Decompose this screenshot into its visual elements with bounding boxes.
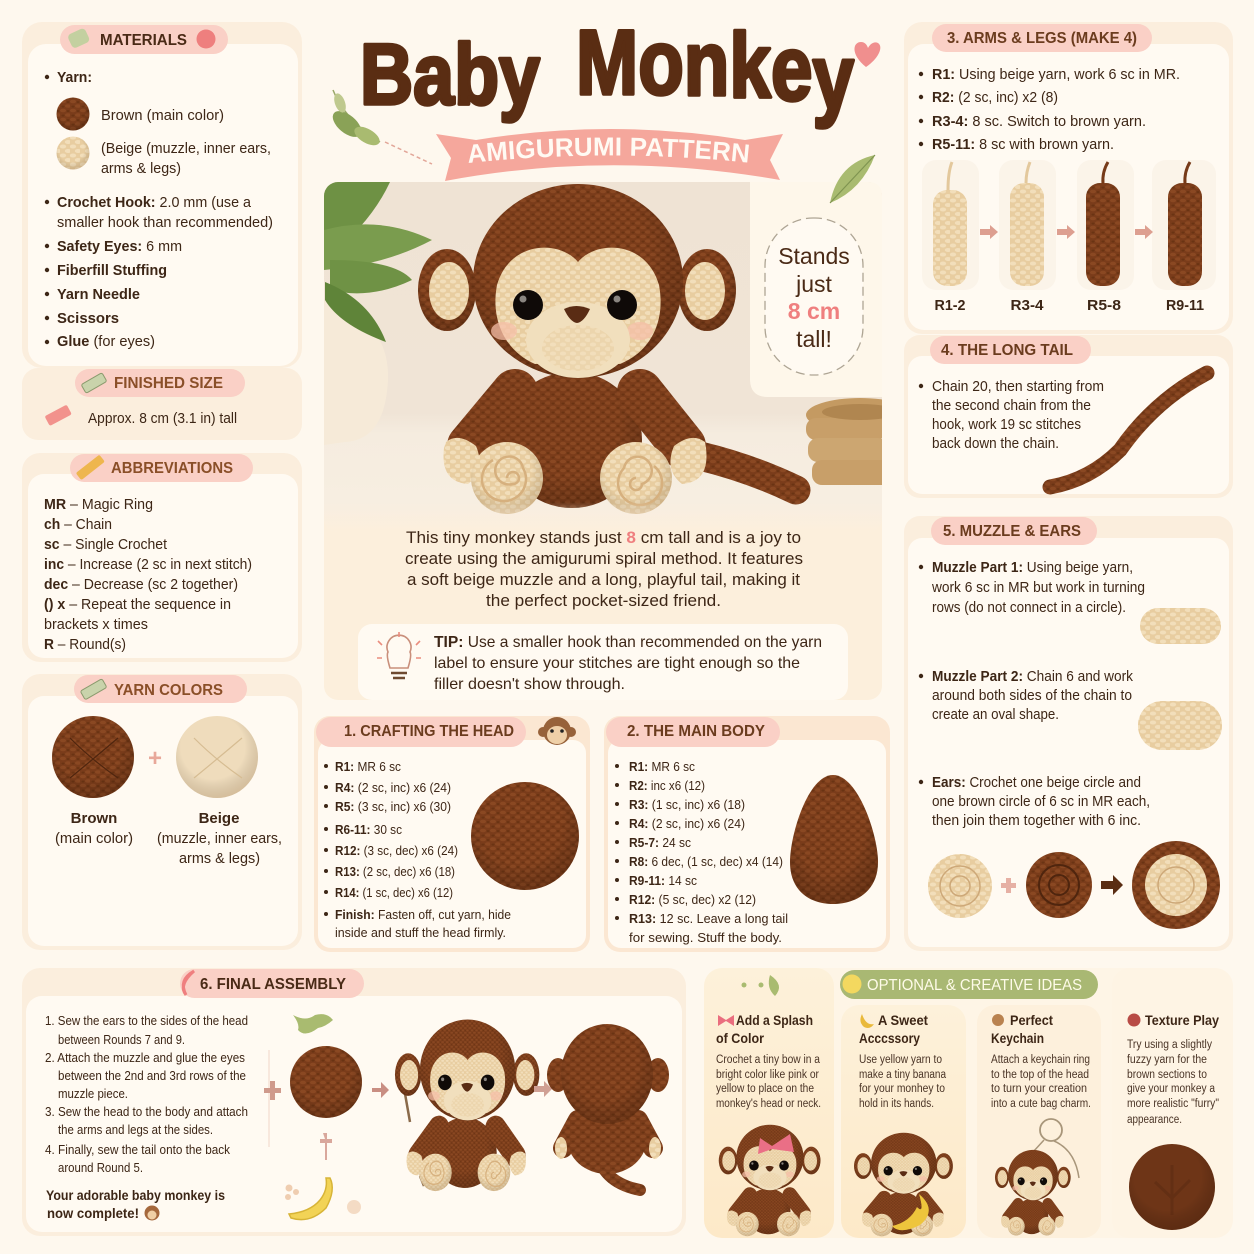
title: Monkey — [576, 12, 854, 129]
list: head rounds: R14: (1 sc, dec) x6 (12) — [335, 886, 453, 900]
heading pill: final assembly — [180, 969, 364, 998]
label: brown: (main color) — [55, 830, 133, 847]
list: body rounds: R4: (2 sc, inc) x6 (24) — [629, 817, 745, 831]
text: muzzle part 1: Muzzle Part 1: Using beige yarn, — [932, 559, 1133, 576]
text: muzzle part 1: rows (do not connect in a circle). — [932, 599, 1126, 616]
list: head rounds: R1: MR 6 sc — [335, 760, 401, 774]
panel: long tail — [904, 335, 1233, 498]
completion note: now complete! — [47, 1205, 139, 1221]
crochet head ball — [471, 782, 579, 890]
text: ears: Ears: Crochet one beige circle and — [932, 774, 1141, 791]
icon: yarn tag — [67, 27, 90, 49]
list: body rounds: R8: 6 dec, (1 sc, dec) x4 (14) — [629, 855, 783, 869]
card: a sweet accessory: A Sweet — [878, 1012, 928, 1028]
panel: yarn colors — [22, 674, 302, 950]
icon: heart — [854, 42, 880, 67]
heading pill: yarn colors: YARN COLORS — [114, 682, 223, 699]
swatch labels: R5-8 — [1087, 297, 1121, 314]
swatch: muzzle part 1 — [1140, 608, 1221, 644]
label: beige: arms & legs) — [179, 850, 260, 867]
list: materials: Yarn Needle — [57, 286, 140, 303]
plus sign: left — [264, 1081, 281, 1100]
card: perfect keychain: Perfect — [1010, 1012, 1053, 1028]
list: abbreviations: R – Round(s) — [44, 636, 126, 653]
list: assembly steps: 2. Attach the muzzle and glue the eyes — [45, 1051, 245, 1065]
tip box: filler doesn't show through. — [434, 676, 625, 693]
heading pill: materials: MATERIALS — [100, 32, 187, 49]
list: abbreviations: () x – Repeat the sequence in — [44, 596, 231, 613]
list: assembly steps: 3. Sew the head to the body and attach — [45, 1105, 248, 1119]
list: materials: Safety Eyes: 6 mm — [57, 238, 182, 255]
card: add a splash of color: Add a Splash — [736, 1012, 813, 1028]
list: materials: Scissors — [57, 310, 119, 327]
heading pill: finished size: FINISHED SIZE — [114, 375, 223, 392]
callout: stands just 8 cm tall: tall! — [796, 326, 832, 352]
icon: ruler — [80, 679, 107, 700]
label: beige: Beige — [199, 810, 239, 827]
list: head rounds: R4: (2 sc, inc) x6 (24) — [335, 781, 451, 795]
list: assembly steps: between the 2nd and 3rd rows of the — [58, 1069, 246, 1083]
title — [360, 12, 854, 129]
card: texture play: brown sections to — [1127, 1069, 1207, 1081]
plant pot — [324, 300, 388, 445]
text: finished size: Approx. 8 cm (3.1 in) tall — [88, 410, 237, 427]
list: head rounds: R12: (3 sc, dec) x6 (24) — [335, 844, 458, 858]
heading pill: yarn colors — [74, 675, 247, 703]
list: head rounds: R5: (3 sc, inc) x6 (30) — [335, 800, 451, 814]
list: body rounds: R2: inc x6 (12) — [629, 779, 705, 793]
list: materials: (Beige (muzzle, inner ears, — [101, 140, 271, 157]
card: perfect keychain: into a cute bag charm. — [991, 1098, 1091, 1110]
list: head rounds: R13: (2 sc, dec) x6 (18) — [335, 865, 455, 879]
card: a sweet accessory: hold in its hands. — [859, 1098, 934, 1110]
text: muzzle part 2: create an oval shape. — [932, 706, 1059, 723]
card: a sweet accessory: for your monhey to — [859, 1083, 945, 1095]
heading pill: muzzle and ears: 5. MUZZLE & EARS — [943, 523, 1081, 540]
monkey tail — [700, 456, 796, 490]
swatch labels: R3-4 — [1010, 297, 1044, 314]
card: add a splash of color — [704, 968, 834, 1238]
divider line — [268, 1050, 270, 1147]
list: head rounds — [324, 760, 511, 940]
basket — [806, 398, 882, 485]
heading pill: materials — [60, 25, 228, 54]
completion note — [46, 1187, 225, 1221]
card: texture play: appearance. — [1127, 1114, 1182, 1126]
icon: ruler — [81, 373, 107, 393]
list: body rounds: R9-11: 14 sc — [629, 874, 697, 888]
icon: monkey face — [538, 717, 576, 745]
text: long tail — [919, 378, 1104, 452]
text: muzzle part 2: Muzzle Part 2: Chain 6 and work — [932, 668, 1133, 685]
swatch: R5-8 — [1086, 162, 1120, 286]
title: Baby — [360, 27, 540, 123]
card: texture play: Try using a slightly — [1127, 1039, 1212, 1051]
completion note: Your adorable baby monkey is — [46, 1187, 225, 1203]
text: ears: one brown circle of 6 sc in MR each, — [932, 793, 1150, 810]
callout: stands just 8 cm tall — [750, 182, 882, 397]
list: body rounds: R1: MR 6 sc — [629, 760, 695, 774]
decoration: paw prints — [285, 1184, 361, 1214]
swatch labels: R9-11 — [1166, 297, 1204, 314]
list: materials: arms & legs) — [101, 160, 181, 177]
panel: arms and legs — [904, 22, 1233, 334]
icon: pencil — [76, 455, 105, 480]
card: add a splash of color: of Color — [716, 1030, 764, 1046]
heading pill: optional and creative ideas: OPTIONAL & CREATIVE IDEAS — [867, 977, 1082, 994]
list: abbreviations: brackets x times — [44, 616, 148, 633]
card: a sweet accessory: Use yellow yarn to — [859, 1054, 942, 1066]
swatch: R3-4 — [1010, 162, 1044, 286]
heading pill: muzzle and ears — [931, 517, 1097, 545]
text: ears — [919, 774, 1150, 829]
crochet body egg — [790, 775, 878, 904]
card: perfect keychain — [977, 1005, 1101, 1238]
list: abbreviations: dec – Decrease (sc 2 together) — [44, 576, 238, 593]
label: brown — [55, 810, 133, 847]
callout: stands just 8 cm tall: 8 cm — [788, 298, 840, 324]
list: assembly steps — [45, 1014, 248, 1175]
card: add a splash of color: Crochet a tiny bow in a — [716, 1054, 821, 1066]
beige yarn ball — [176, 716, 258, 798]
icon: banana — [289, 1178, 332, 1220]
heading pill: optional and creative ideas — [840, 970, 1098, 999]
card: perfect keychain: to turn your creation — [991, 1083, 1087, 1095]
list: body rounds: R13: 12 sc. Leave a long tail — [629, 912, 788, 926]
list: materials: Brown (main color) — [101, 107, 224, 124]
plus sign: below — [320, 1133, 332, 1160]
ribbon banner: AMIGURUMI PATTERN — [468, 138, 749, 163]
panel: muzzle and ears — [904, 516, 1233, 951]
decoration: left leaf sprig — [328, 90, 432, 164]
list: body rounds: R12: (5 sc, dec) x2 (12) — [629, 893, 756, 907]
main crochet monkey — [418, 184, 736, 514]
text: long tail: Chain 20, then starting from — [932, 378, 1104, 395]
brown yarn ball — [52, 716, 134, 798]
list: abbreviations — [44, 496, 252, 653]
icon: light bulb — [377, 632, 421, 678]
description paragraph: the perfect pocket-sized friend. — [486, 592, 721, 610]
list: abbreviations: ch – Chain — [44, 516, 112, 533]
list: head rounds: Finish: Fasten off, cut yarn, hide — [335, 908, 511, 922]
heading pill: arms and legs: 3. ARMS & LEGS (MAKE 4) — [947, 30, 1137, 47]
tip box: TIP: Use a smaller hook than recommended on the yarn — [434, 634, 822, 651]
plant leaves — [324, 182, 432, 342]
list: materials: Crochet Hook: 2.0 mm (use a — [57, 194, 252, 211]
list: abbreviations: inc – Increase (2 sc in next stitch) — [44, 556, 252, 573]
crochet long tail — [1050, 373, 1207, 487]
list: materials: Yarn: — [57, 69, 92, 86]
swatch labels: R1-2 — [934, 297, 966, 314]
heading pill: crafting the head: 1. CRAFTING THE HEAD — [344, 723, 514, 740]
decoration: leaf — [293, 1014, 333, 1034]
text: muzzle part 2: around both sides of the chain to — [932, 687, 1132, 704]
arm swatches — [922, 160, 1216, 314]
card: texture play: fuzzy yarn for the — [1127, 1054, 1207, 1066]
label: beige — [157, 810, 282, 867]
swatch: R9-11 — [1168, 162, 1202, 286]
panel: materials — [22, 22, 302, 368]
card: perfect keychain: Attach a keychain ring — [991, 1054, 1090, 1066]
arrows between swatches — [980, 225, 1153, 239]
panel: main body — [604, 716, 890, 952]
arrow to assembled monkey — [372, 1082, 389, 1098]
swatch: muzzle part 2 — [1138, 701, 1222, 750]
heading pill: crafting the head — [316, 717, 526, 747]
text: muzzle part 2 — [919, 668, 1133, 723]
card: add a splash of color: bright color like pink or — [716, 1069, 819, 1081]
card: perfect keychain: Keychain — [991, 1030, 1044, 1046]
heading pill: main body — [606, 717, 780, 747]
panel: finished size — [22, 368, 302, 440]
description paragraph: a soft beige muzzle and a long, playful tail, making it — [407, 571, 800, 589]
heading pill: main body: 2. THE MAIN BODY — [627, 723, 765, 740]
tip box: label to ensure your stitches are tight enough so the — [434, 655, 800, 672]
list: arm rounds — [919, 66, 1180, 153]
list: materials — [45, 69, 273, 350]
list: arm rounds: R3-4: 8 sc. Switch to brown yarn. — [932, 113, 1146, 130]
text: muzzle part 1: work 6 sc in MR but work in turning — [931, 579, 1145, 596]
card: add a splash of color: monkey's head or neck. — [716, 1098, 821, 1110]
list: materials: smaller hook than recommended) — [57, 214, 273, 231]
list: body rounds: for sewing. Stuff the body. — [629, 931, 782, 945]
list: arm rounds: R5-11: 8 sc with brown yarn. — [932, 136, 1114, 153]
ear assembly diagram — [928, 841, 1220, 929]
list: assembly steps: 1. Sew the ears to the sides of the head — [45, 1014, 248, 1028]
list: materials: Fiberfill Stuffing — [57, 262, 167, 279]
card: perfect keychain: to the top of the head — [991, 1069, 1089, 1081]
list: assembly steps: the arms and legs at the sides. — [58, 1123, 213, 1137]
panel: final assembly — [22, 968, 686, 1236]
heading pill: finished size — [75, 369, 245, 397]
card: a sweet accessory: make a tiny banana — [859, 1069, 947, 1081]
list: head rounds: inside and stuff the head firmly. — [335, 926, 506, 940]
panel: hero — [324, 182, 914, 700]
panel: abbreviations — [22, 453, 302, 662]
card: texture play — [1112, 968, 1233, 1238]
text: long tail: back down the chain. — [932, 435, 1059, 452]
ribbon banner — [436, 129, 783, 181]
heading pill: final assembly: 6. FINAL ASSEMBLY — [200, 976, 346, 993]
decoration: small leaf sprigs — [742, 975, 779, 996]
description paragraph — [405, 529, 803, 610]
text: long tail: hook, work 19 sc stitches — [932, 416, 1081, 433]
list: arm rounds: R1: Using beige yarn, work 6 sc in MR. — [932, 66, 1180, 83]
description paragraph: This tiny monkey stands just 8 cm tall and is a joy to — [406, 529, 801, 547]
small arrow to back view — [534, 1081, 552, 1097]
heading pill: long tail: 4. THE LONG TAIL — [941, 342, 1073, 359]
list: arm rounds: R2: (2 sc, inc) x2 (8) — [932, 89, 1058, 106]
list: head rounds: R6-11: 30 sc — [335, 823, 402, 837]
card: texture play: Texture Play — [1145, 1012, 1219, 1028]
text: long tail: the second chain from the — [932, 397, 1091, 414]
assembled monkey front — [395, 1019, 539, 1191]
card: texture play: more realistic "furry" — [1127, 1098, 1219, 1110]
list: body rounds — [615, 760, 788, 945]
description paragraph: create using the amigurumi spiral method. It features — [405, 550, 803, 568]
list: assembly steps: between Rounds 7 and 9. — [58, 1033, 185, 1047]
list: assembly steps: muzzle piece. — [58, 1087, 128, 1101]
card: texture play: give your monkey a — [1127, 1083, 1216, 1095]
crochet head — [290, 1046, 362, 1118]
heading pill: abbreviations: ABBREVIATIONS — [111, 460, 233, 477]
assembled monkey back — [547, 1024, 669, 1190]
list: body rounds: R5-7: 24 sc — [629, 836, 691, 850]
heading pill: long tail — [930, 336, 1091, 364]
card: a sweet accessory: Acccssory — [859, 1030, 920, 1046]
swatch: R1-2 — [933, 162, 967, 286]
hero photo of monkey — [324, 182, 882, 514]
tip box — [358, 624, 848, 700]
list: body rounds: R3: (1 sc, inc) x6 (18) — [629, 798, 745, 812]
twig beside monkey — [404, 1088, 424, 1186]
decoration: right leaf — [830, 155, 875, 203]
panel: optional and creative ideas — [704, 968, 1233, 1238]
icon: pink measuring tape — [45, 405, 72, 426]
card: a sweet accessory — [841, 1005, 966, 1238]
callout: stands just 8 cm tall: Stands — [778, 243, 850, 269]
label: beige: (muzzle, inner ears, — [157, 830, 282, 847]
list: assembly steps: 4. Finally, sew the tail onto the back — [45, 1143, 231, 1157]
panel: crafting the head — [314, 716, 590, 952]
list: abbreviations: MR – Magic Ring — [44, 496, 153, 513]
callout: stands just 8 cm tall: just — [795, 271, 833, 297]
text: muzzle part 1 — [919, 559, 1145, 616]
swatch labels — [934, 297, 1204, 314]
heading pill: abbreviations — [70, 454, 253, 482]
plus sign: + — [148, 745, 162, 772]
text: ears: then join them together with 6 inc. — [932, 812, 1141, 829]
label: brown: Brown — [71, 810, 117, 827]
icon: pink yarn flower — [196, 30, 216, 48]
card: add a splash of color: yellow to place on the — [716, 1083, 814, 1095]
list: abbreviations: sc – Single Crochet — [44, 536, 168, 553]
heading pill: arms and legs — [932, 24, 1152, 52]
list: assembly steps: around Round 5. — [58, 1161, 143, 1175]
list: materials: Glue (for eyes) — [57, 333, 155, 350]
